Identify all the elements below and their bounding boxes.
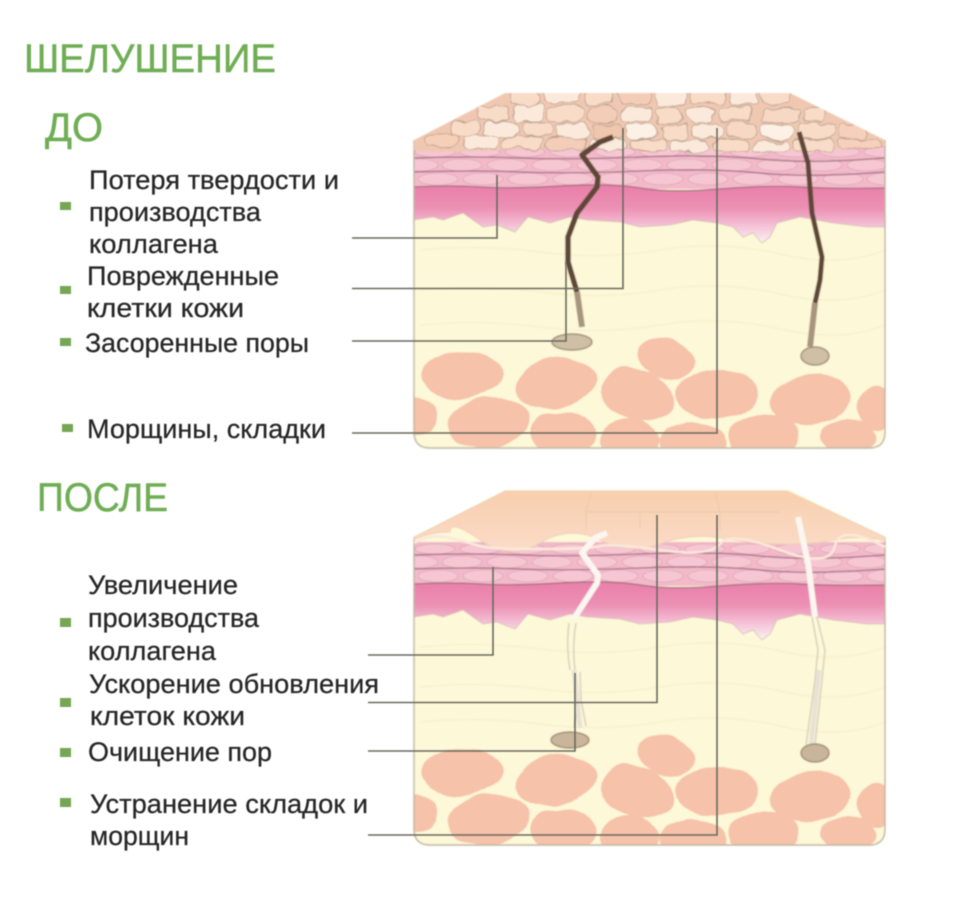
- item: faster renewal: клеток кожи: [90, 701, 245, 731]
- bullet: [60, 798, 71, 807]
- bullet: [60, 618, 71, 627]
- item: wrinkle removal: [90, 789, 368, 851]
- callout lines: after: [368, 515, 717, 835]
- bullet: [62, 424, 73, 432]
- clean hair follicle, right: [798, 517, 829, 762]
- callout lines: before: [352, 128, 717, 433]
- item: clogged pores: Засоренные поры: [85, 328, 309, 358]
- item: collagen increase: коллагена: [88, 636, 217, 666]
- list: after: [60, 570, 379, 851]
- bullet: [60, 286, 71, 294]
- item: faster renewal: Ускорение обновления: [89, 669, 379, 699]
- clean hair follicle, left: [551, 533, 607, 748]
- clogged hair follicle, right: [799, 132, 829, 365]
- item: damaged cells: клетки кожи: [87, 293, 244, 323]
- item: firmness loss: производства: [89, 197, 262, 227]
- clogged hair follicle, left: [552, 137, 613, 350]
- list: before: [60, 165, 339, 444]
- smooth top layer: [414, 491, 885, 559]
- item: faster renewal: [89, 669, 379, 731]
- item: collagen increase: производства: [88, 603, 260, 633]
- item: collagen increase: Увеличение: [88, 570, 238, 600]
- item: firmness loss: [89, 165, 339, 259]
- bullet: [60, 698, 71, 707]
- item: firmness loss: коллагена: [89, 229, 219, 259]
- flaky top layer: [412, 88, 885, 152]
- item: firmness loss: Потеря твердости и: [89, 165, 339, 195]
- bullet: [60, 202, 71, 210]
- item: damaged cells: [87, 261, 279, 323]
- heading: before: ДО: [45, 106, 103, 150]
- panel: before skin diagram: [412, 92, 886, 450]
- bullet: [60, 338, 71, 346]
- item: collagen increase: [88, 570, 260, 666]
- title: ШЕЛУШЕНИЕ: [24, 37, 276, 81]
- item: wrinkles: Морщины, складки: [87, 414, 326, 444]
- heading: after: ПОСЛЕ: [37, 476, 168, 520]
- bullet: [60, 748, 71, 757]
- item: damaged cells: Поврежденные: [87, 261, 279, 291]
- item: wrinkle removal: морщин: [90, 821, 189, 851]
- item: pore cleansing: Очищение пор: [88, 737, 272, 767]
- item: wrinkle removal: Устранение складок и: [90, 789, 368, 819]
- panel: after skin diagram: [398, 487, 903, 861]
